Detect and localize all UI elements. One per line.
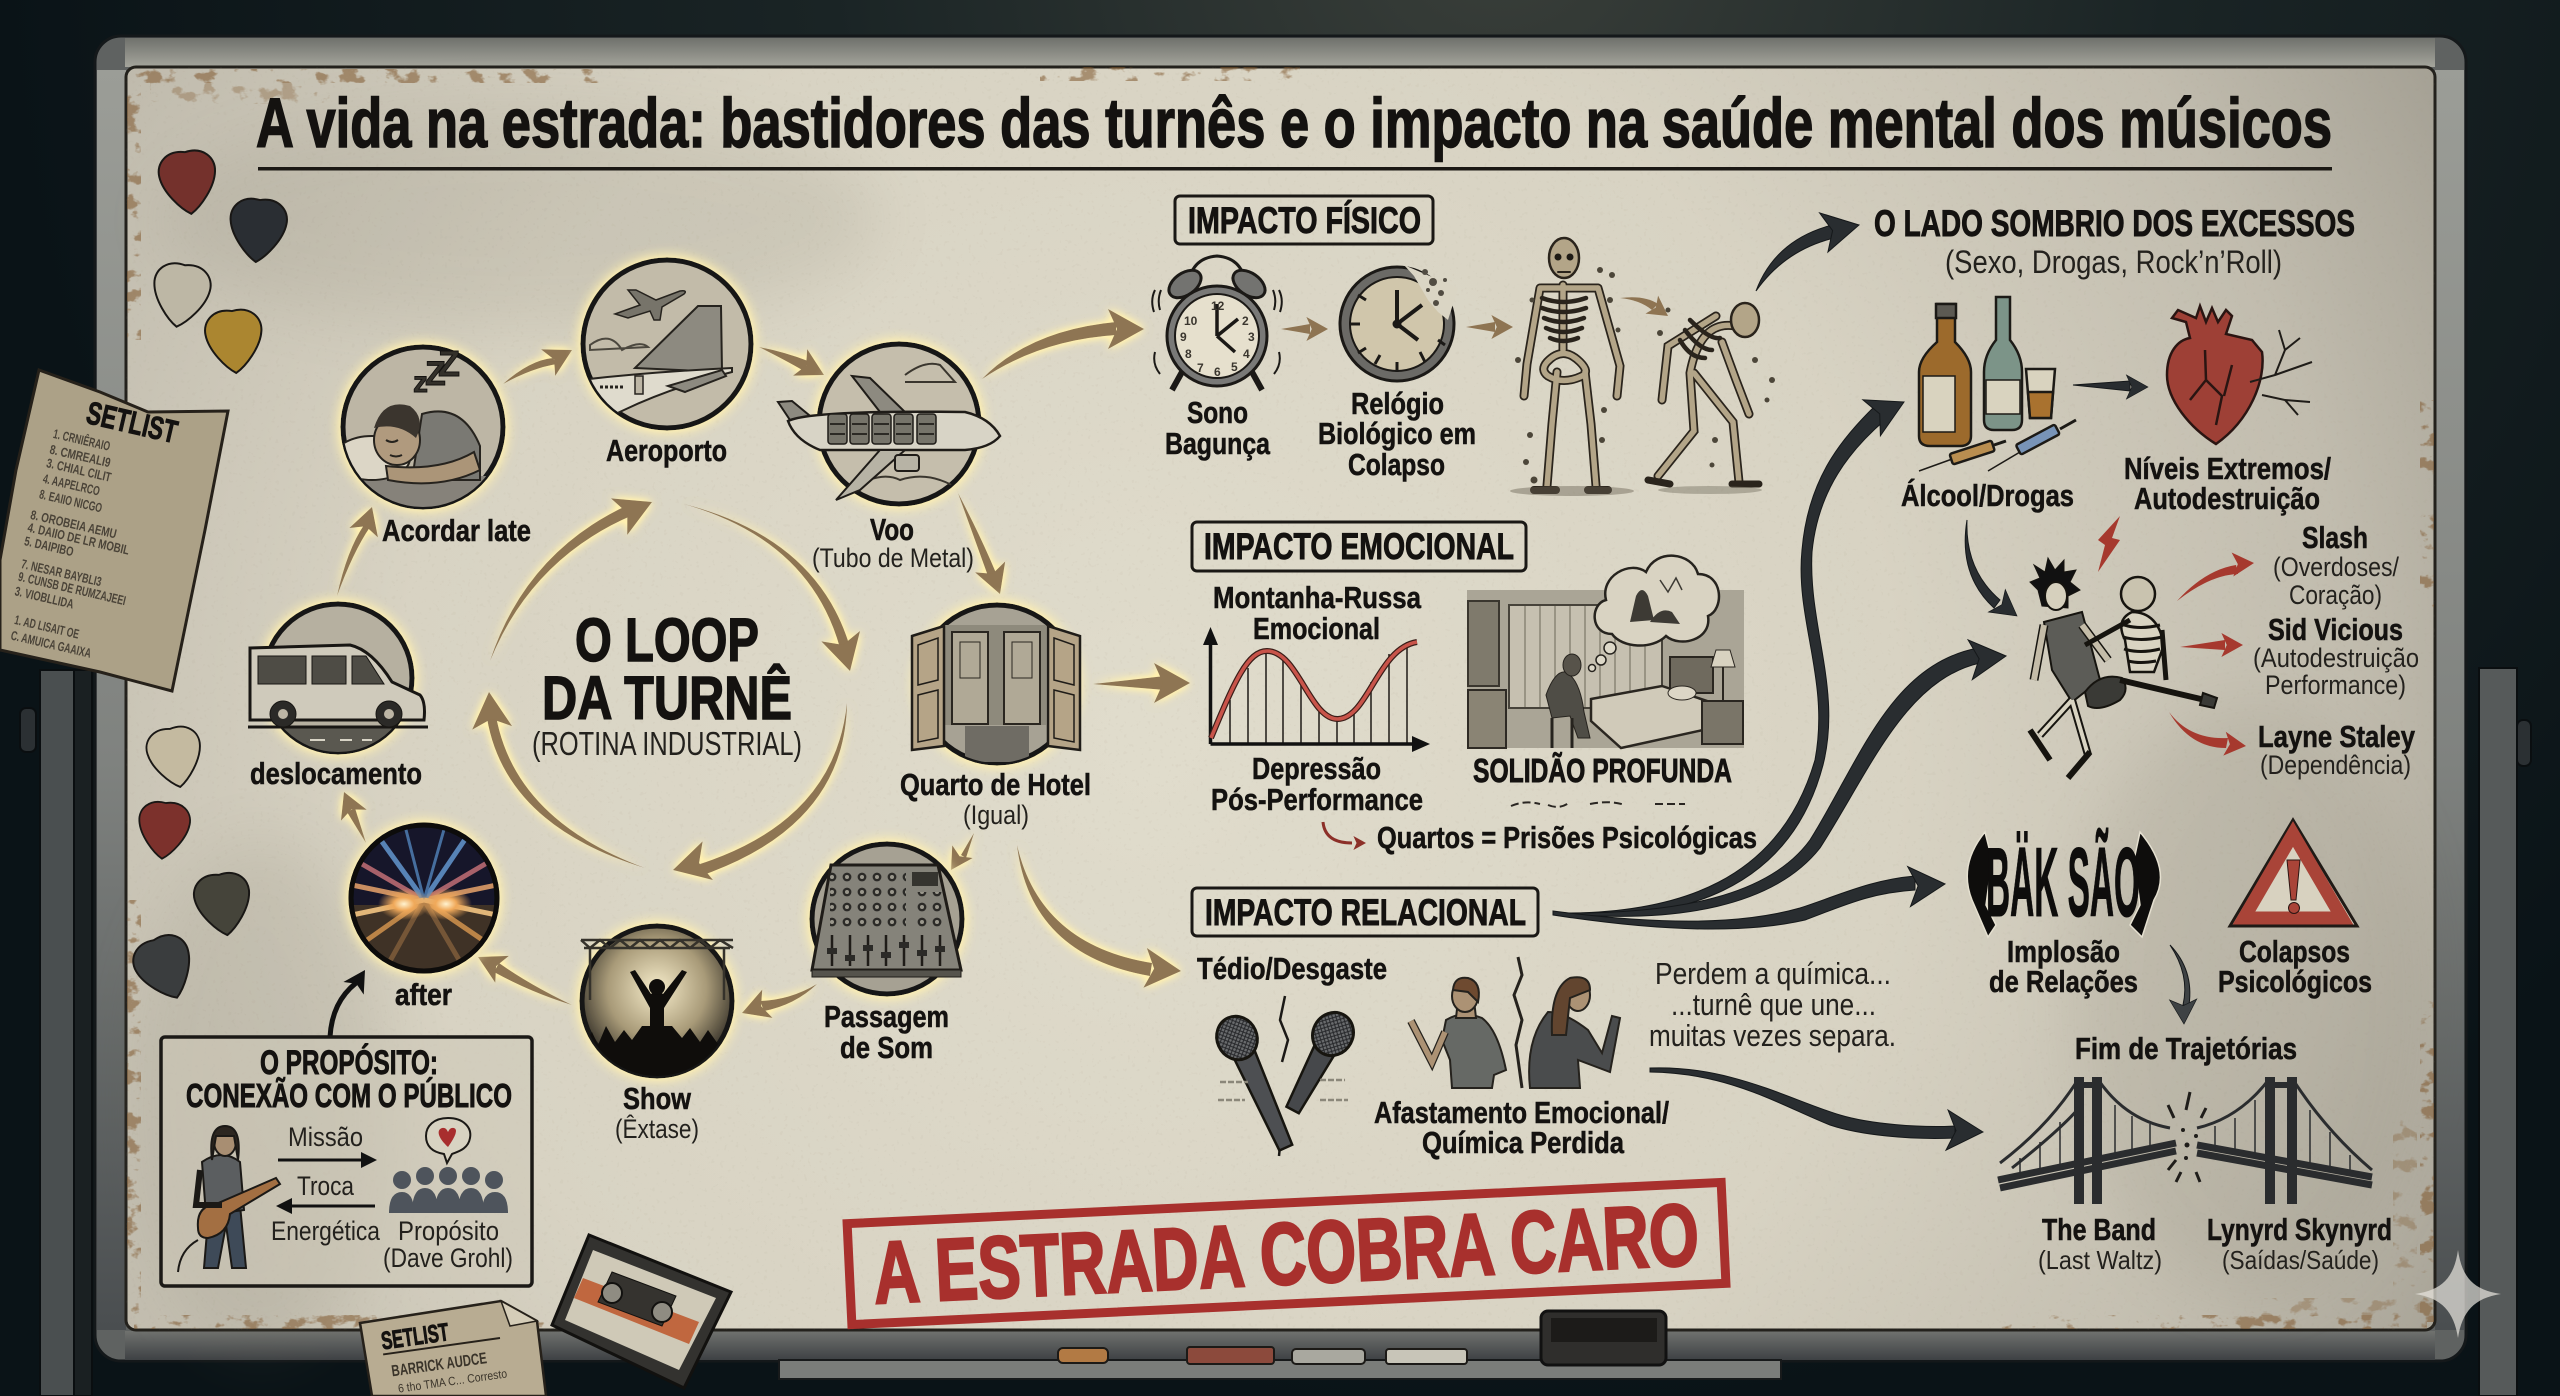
- arrow: voo to quarto: [958, 493, 1015, 599]
- arrow: deslocamento to acordar: [337, 502, 386, 596]
- loop and node arrows: [331, 309, 1190, 1027]
- label: colapsos psicologicos: Psicológicos: [2218, 964, 2372, 999]
- label: relogio biologico em colapso: Colapso: [1348, 447, 1445, 482]
- heading: [1192, 888, 1538, 936]
- guitar picks: [127, 148, 288, 1008]
- panel: o proposito: Energética: [271, 1216, 381, 1246]
- icon: alarm clock: 5: [1231, 360, 1238, 374]
- icon: alarm clock: 9: [1180, 330, 1187, 344]
- label: layne staley: Layne Staley: [2258, 719, 2416, 754]
- icon: eraser: [1541, 1311, 1666, 1365]
- quote text: [1649, 956, 1896, 1053]
- label: niveis extremos: Níveis Extremos/: [2124, 451, 2331, 486]
- panel: impacto relacional: [1192, 888, 1896, 1160]
- central title: o loop da turnê: DA TURNÊ: [542, 664, 792, 732]
- node: voo: (Tubo de Metal): [812, 543, 974, 573]
- setlist paper top left: [0, 370, 228, 691]
- node: after: after: [395, 977, 452, 1012]
- panel: o proposito: CONEXÃO COM O PÚBLICO: [186, 1077, 512, 1114]
- label: colapsos psicologicos: [2218, 934, 2372, 999]
- label: sid vicious: [2253, 612, 2419, 700]
- label: montanha-russa emocional: [1213, 580, 1422, 646]
- label: alcool drogas: Álcool/Drogas: [1901, 478, 2074, 513]
- setlist paper top left: 4. DAIIO DE LR MOBIL: [26, 520, 131, 558]
- label: lynyrd skynyrd: Lynyrd Skynyrd: [2207, 1212, 2392, 1247]
- icon: alarm clock: 4: [1243, 347, 1250, 361]
- label: implosao de relacoes: Implosão: [2007, 934, 2120, 969]
- label: niveis extremos: [2124, 451, 2331, 516]
- icon: alarm clock: 7: [1197, 361, 1204, 375]
- panel: o proposito: O PROPÓSITO:: [260, 1044, 438, 1082]
- loop arc: bottom right: [668, 703, 847, 889]
- icon: alarm clock: 8: [1185, 347, 1192, 361]
- arrow: alcool to heart: [2073, 375, 2148, 399]
- label: sono bagunca: Bagunça: [1165, 426, 1271, 461]
- arrow: acordar to aeroporto: [503, 337, 579, 384]
- icon: thought bubble: [1588, 556, 1719, 672]
- sparkle watermark: [2415, 1250, 2501, 1338]
- heading: IMPACTO RELACIONAL: [1205, 892, 1526, 933]
- label: afastamento emocional: Química Perdida: [1422, 1125, 1625, 1160]
- arrow: troca: [276, 1198, 375, 1214]
- panel: o proposito: (Dave Grohl): [383, 1243, 513, 1273]
- label: tedio desgaste: Tédio/Desgaste: [1197, 951, 1387, 986]
- label: slash: Slash: [2302, 520, 2368, 555]
- label: sid vicious: Sid Vicious: [2268, 612, 2403, 647]
- heading: O LADO SOMBRIO DOS EXCESSOS: [1874, 203, 2355, 244]
- icon: alarm clock: 10: [1184, 314, 1198, 328]
- heading: (Sexo, Drogas, Rock’n’Roll): [1945, 244, 2282, 280]
- quote text: muitas vezes separa.: [1649, 1018, 1896, 1053]
- label: the band: The Band: [2042, 1212, 2156, 1247]
- panel: fim de trajetorias: BÄK SÃO: [1986, 827, 2140, 937]
- setlist paper bottom: SETLIST: [379, 1318, 451, 1355]
- node: show: (Êxtase): [615, 1113, 699, 1144]
- node: quarto de hotel: [900, 605, 1091, 830]
- icon: bent skeleton: [1648, 303, 1775, 494]
- node: voo: Voo: [870, 512, 914, 547]
- icon: grey marker: [1292, 1349, 1365, 1364]
- panel: o proposito: Missão: [288, 1122, 363, 1152]
- panel: impacto emocional: [1192, 522, 1757, 855]
- icon: punk and skeleton with guitar: [2030, 558, 2217, 778]
- setlist paper top left: 5. DAIPIBO: [23, 533, 75, 559]
- setlist paper top left: 7. NESAR BAYBLI3: [20, 556, 103, 589]
- setlist paper top left: 3. VIOBLLIDA: [13, 583, 76, 612]
- label: slash: (Overdoses/: [2273, 552, 2399, 582]
- setlist paper top left: 1. CRNIÊRAIO: [52, 426, 112, 454]
- setlist paper top left: 4. AAPELRCO: [42, 471, 101, 499]
- chart: emotional rollercoaster: [1203, 627, 1430, 752]
- arrow: alcool to sid: [1965, 520, 2025, 627]
- arrow: aeroporto to voo: [759, 347, 831, 388]
- label: the band: (Last Waltz): [2038, 1245, 2162, 1275]
- label: relogio biologico em colapso: Biológico em: [1318, 416, 1476, 451]
- loop arc: top right: [684, 504, 869, 676]
- node: deslocamento: [248, 604, 428, 791]
- label: fim de trajetorias: Fim de Trajetórias: [2075, 1031, 2297, 1066]
- node: acordar late: Acordar late: [382, 513, 531, 548]
- setlist paper top left: 8. OROBEIA AEMU: [29, 507, 118, 541]
- arrow: relacional to sid: [1553, 636, 2008, 916]
- icon: lightning: [2098, 516, 2120, 572]
- setlist paper bottom: [360, 1301, 546, 1396]
- label: colapsos psicologicos: Colapsos: [2239, 934, 2350, 969]
- stamp: a estrada cobra caro: A ESTRADA COBRA CARO: [871, 1185, 1701, 1322]
- central title: o loop da turnê: [532, 606, 802, 762]
- loop arc: top left: [490, 484, 660, 661]
- whiteboard stand legs: [20, 668, 2531, 1396]
- quote text: ...turnê que une...: [1671, 987, 1876, 1022]
- arrow: sono to relogio: [1281, 317, 1328, 341]
- node: aeroporto: Aeroporto: [606, 433, 727, 468]
- icon: white marker: [1386, 1349, 1467, 1364]
- panel: o lado sombrio dos excessos: [1874, 203, 2419, 780]
- setlist paper bottom: 6 tho TMA C... Corresto: [397, 1366, 508, 1396]
- node: deslocamento: deslocamento: [250, 756, 422, 791]
- label: lynyrd skynyrd: (Saídas/Saúde): [2222, 1245, 2379, 1275]
- label: afastamento emocional: [1374, 1095, 1669, 1160]
- label: the band: [2038, 1212, 2162, 1275]
- arrow: afastamento to bridge: [1650, 1068, 1984, 1152]
- icon: metal band logo: [1967, 827, 2160, 937]
- label: depressao pos-performance: Pós-Performance: [1211, 782, 1423, 817]
- icon: damaged heart: [2167, 306, 2312, 444]
- icon: audience with heart bubble: [389, 1118, 508, 1213]
- label: afastamento emocional: Afastamento Emocional/: [1374, 1095, 1669, 1130]
- arrow: relogio to skeleton: [1466, 315, 1513, 339]
- node: passagem de som: de Som: [840, 1030, 933, 1065]
- node: quarto de hotel: Quarto de Hotel: [900, 767, 1091, 802]
- heading: [1874, 203, 2355, 280]
- label: montanha-russa emocional: Emocional: [1253, 611, 1380, 646]
- setlist paper top left: 1. AD LISAIT OE: [13, 612, 81, 642]
- node: aeroporto: [560, 260, 751, 468]
- icon: orange marker: [1058, 1348, 1108, 1363]
- quote text: Perdem a química...: [1655, 956, 1891, 991]
- callout: quartos prisoes psicologicas: Quartos = Prisões Psicológicas: [1377, 820, 1757, 855]
- arrow: proposito to after: [330, 964, 375, 1037]
- panel: fim de trajetorias: [1967, 820, 2392, 1275]
- label: solidao profunda: [1473, 752, 1732, 807]
- setlist paper top left: SETLIST: [83, 394, 181, 450]
- cassette tape: [552, 1235, 731, 1388]
- icon: alarm clock: 3: [1248, 330, 1255, 344]
- node: acordar late: Z: [438, 343, 460, 384]
- heading: [1192, 522, 1526, 571]
- node: show: [581, 926, 735, 1144]
- node: passagem de som: Passagem: [824, 999, 949, 1034]
- icon: red marker: [1187, 1347, 1274, 1364]
- label: montanha-russa emocional: Montanha-Russa: [1213, 580, 1422, 615]
- label: layne staley: (Dependência): [2260, 750, 2411, 780]
- arrows: red to victims: [2169, 551, 2255, 758]
- node: acordar late: z: [413, 366, 428, 399]
- label: sid vicious: (Autodestruição: [2253, 643, 2419, 673]
- panel: o proposito: Troca: [297, 1171, 355, 1201]
- setlist paper top left: 3. CHIAL CILIT: [45, 455, 113, 485]
- node: acordar late: [334, 343, 531, 548]
- arrow: skeleton to bent skeleton: [1620, 296, 1674, 325]
- icon: alarm clock: 2: [1242, 314, 1249, 328]
- label: slash: [2273, 520, 2399, 610]
- icon: alarm clock: 6: [1214, 365, 1221, 379]
- label: implosao de relacoes: de Relações: [1989, 964, 2138, 999]
- heading: IMPACTO EMOCIONAL: [1204, 526, 1514, 567]
- label: relogio biologico em colapso: [1318, 386, 1476, 482]
- central title: o loop da turnê: (ROTINA INDUSTRIAL): [532, 725, 802, 762]
- node: quarto de hotel: (Igual): [963, 800, 1029, 830]
- arrow: implosao to fim: [2170, 945, 2198, 1024]
- arrow: relacional to band logo: [1553, 864, 1946, 929]
- setlist paper top left: 8. CMREALI9: [48, 442, 112, 470]
- node: after: [351, 825, 497, 1012]
- arrow: quarto to impacto emocional: [1093, 663, 1190, 703]
- label: sid vicious: Performance): [2265, 670, 2406, 700]
- label: slash: Coração): [2289, 580, 2382, 610]
- setlist paper top left: 9. CUNSB DE RUMZAJEEI: [17, 569, 127, 608]
- label: layne staley: [2258, 719, 2416, 780]
- label: lynyrd skynyrd: [2207, 1212, 2392, 1275]
- icon: alarm clock: [1152, 256, 1282, 390]
- arrow: after to deslocamento: [331, 787, 367, 843]
- label: implosao de relacoes: [1989, 934, 2138, 999]
- label: relogio biologico em colapso: Relógio: [1351, 386, 1444, 421]
- arrow: quarto to impacto relacional: [1017, 845, 1183, 991]
- icon: warning triangle: [2230, 820, 2357, 926]
- label: sono bagunca: Sono: [1187, 395, 1248, 430]
- central title: o loop da turnê: O LOOP: [575, 606, 759, 674]
- label: sono bagunca: [1165, 395, 1271, 461]
- stamp: a estrada cobra caro: [847, 1182, 1726, 1325]
- icon: arguing couple: [1411, 957, 1620, 1088]
- icon: standing skeleton: [1510, 238, 1634, 496]
- node: passagem de som: [812, 844, 962, 1065]
- icon: alarm clock: 12: [1211, 299, 1225, 313]
- setlist paper top left: C. AMUICA GAAIXA: [9, 628, 93, 661]
- arrow: relacional to alcool: [1553, 384, 1913, 915]
- node: show: Show: [623, 1081, 692, 1116]
- illustration: lonely hotel room: [1467, 556, 1744, 748]
- icon: broken clock: [1340, 265, 1458, 381]
- arrow: missao: [278, 1152, 377, 1168]
- setlist paper top left: 8. EAIIO NICGO: [38, 486, 104, 515]
- dark arrows: [1553, 205, 2198, 1152]
- panel: o proposito: Propósito: [398, 1216, 499, 1246]
- arrow: quarto to passagem: [941, 833, 974, 876]
- icon: crossed microphones: [1210, 996, 1361, 1156]
- icon: broken bridge: [1998, 1077, 2372, 1204]
- marker tray: [779, 1311, 1781, 1379]
- node: acordar late: Z: [425, 355, 446, 393]
- label: depressao pos-performance: Depressão: [1252, 751, 1381, 786]
- arrow: passagem to show: [737, 984, 817, 1027]
- label: niveis extremos: Autodestruição: [2134, 481, 2320, 516]
- node: voo: [778, 344, 1000, 573]
- setlist paper bottom: BARRICK AUDCE: [390, 1350, 488, 1380]
- heading: [1175, 196, 1433, 244]
- icon: bottles and syringes: [1919, 297, 2076, 471]
- panel: o proposito: [161, 1037, 532, 1286]
- loop arc: bottom left: [469, 690, 645, 868]
- heading: IMPACTO FÍSICO: [1188, 200, 1421, 241]
- panel: impacto fisico: [1152, 196, 1775, 496]
- label: solidao profunda: SOLIDÃO PROFUNDA: [1473, 752, 1732, 789]
- arrow: show to after: [471, 944, 572, 1005]
- arrow: to o lado sombrio: [1756, 205, 1863, 291]
- label: depressao pos-performance: [1211, 751, 1423, 817]
- arrow: voo to impacto fisico: [982, 309, 1144, 379]
- icon: guitarist: [178, 1126, 280, 1272]
